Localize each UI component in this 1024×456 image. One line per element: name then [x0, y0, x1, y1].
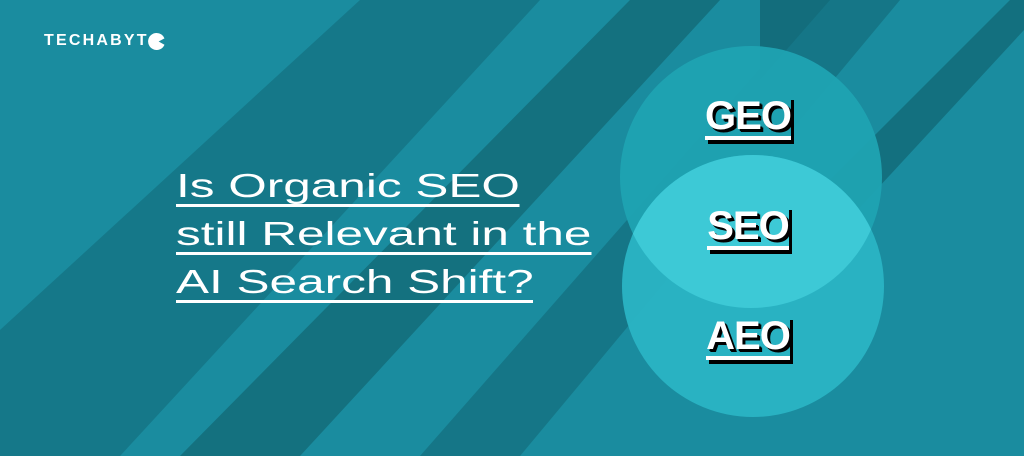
logo: TECHABYT — [44, 32, 149, 49]
label GEO: GEO — [705, 94, 791, 138]
venn: top circle GEO — [620, 46, 882, 308]
title: Is Organic SEO — [176, 167, 520, 204]
label SEO: SEO — [707, 204, 789, 248]
venn: overlap lens SEO — [633, 155, 871, 308]
label AEO: AEO — [706, 314, 790, 358]
title: still Relevant in the — [176, 215, 591, 252]
title — [176, 167, 592, 303]
title: AI Search Shift? — [176, 263, 534, 300]
venn: bottom circle AEO — [622, 155, 884, 417]
